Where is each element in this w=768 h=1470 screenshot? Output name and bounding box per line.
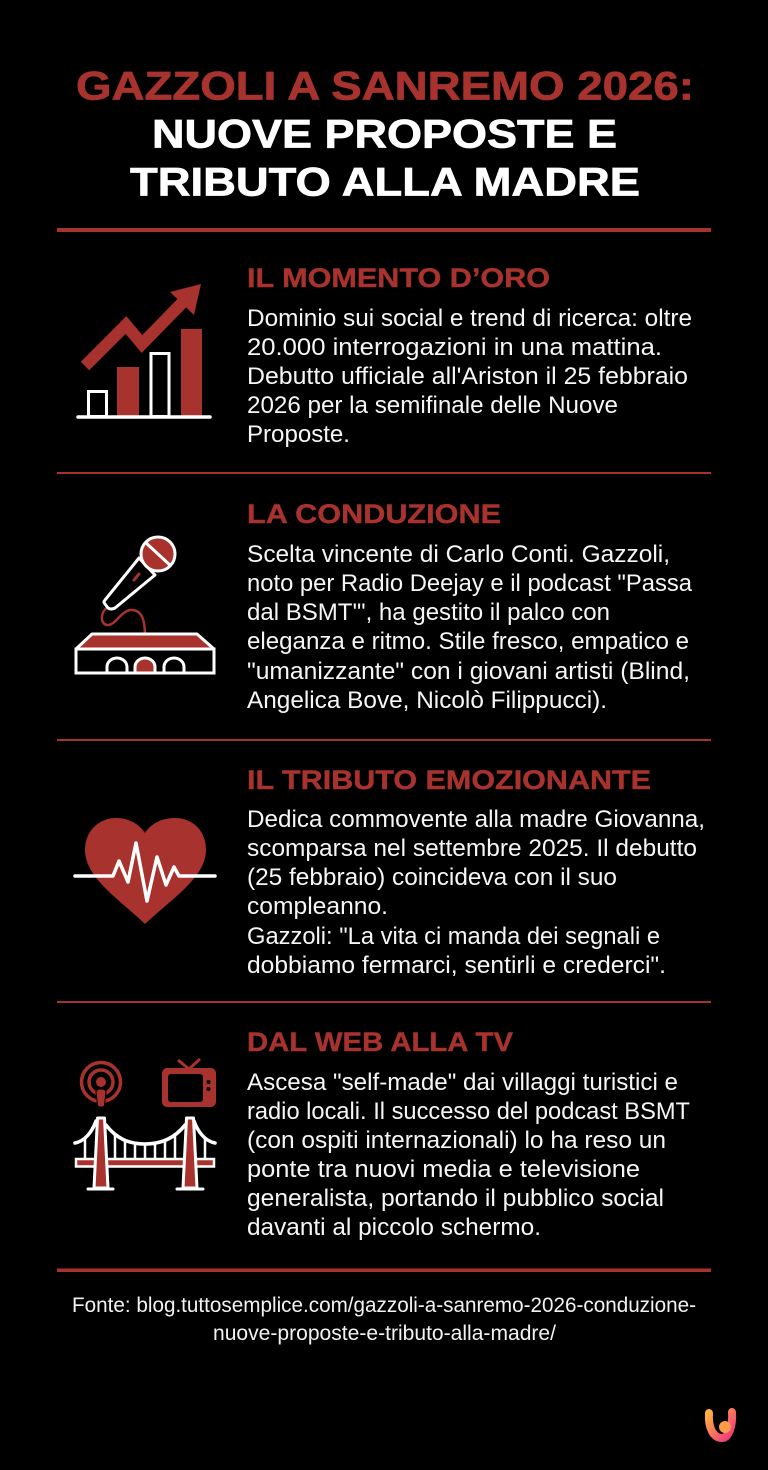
text block: il tributo emozionante: compleanno. (247, 893, 388, 920)
icon: logo (709, 1412, 732, 1438)
title: NUOVE PROPOSTE E (152, 112, 617, 156)
text block: il tributo emozionante: Gazzoli: "La vita ci manda dei segnali e (247, 923, 660, 950)
text block: il momento d'oro: Dominio sui social e trend di ricerca: oltre (247, 305, 692, 332)
text block: la conduzione: Scelta vincente di Carlo Conti. Gazzoli, (247, 541, 670, 568)
heading: il tributo emozionante: IL TRIBUTO EMOZIONANTE (247, 765, 651, 795)
title: TRIBUTO ALLA MADRE (130, 160, 640, 204)
heading: dal web alla tv: DAL WEB ALLA TV (247, 1027, 513, 1057)
text block: dal web alla tv: generalista, portando il pubblico social (247, 1185, 664, 1212)
text block: dal web alla tv: (con ospiti internazionali) lo ha reso un (247, 1127, 666, 1154)
text block: il momento d'oro: Proposte. (247, 421, 350, 448)
text block: dal web alla tv: davanti al piccolo schermo. (247, 1214, 541, 1241)
icon: growth chart (78, 284, 210, 417)
text block: il tributo emozionante: scomparsa nel settembre 2025. Il debutto (247, 835, 697, 862)
text block: il tributo emozionante: Dedica commovente alla madre Giovanna, (247, 806, 705, 833)
text block: il tributo emozionante: dobbiamo fermarci, sentirli e crederci". (247, 952, 666, 979)
title: GAZZOLI A SANREMO 2026: (76, 64, 694, 108)
icon: podcast (82, 1062, 120, 1107)
text block: la conduzione: "umanizzante" con i giovani artisti (Blind, (247, 658, 690, 685)
heading: la conduzione: LA CONDUZIONE (247, 499, 501, 529)
text block: il momento d'oro: 2026 per la semifinale delle Nuove (247, 392, 618, 419)
icon: suspension bridge (75, 1118, 215, 1189)
text block: il tributo emozionante: (25 febbraio) coincideva con il suo (247, 864, 617, 891)
panel: la conduzione (76, 499, 693, 714)
panel: il momento d'oro (78, 263, 692, 448)
text block: dal web alla tv: Ascesa "self-made" dai villaggi turistici e (247, 1069, 678, 1096)
icon: television (162, 1059, 216, 1107)
text block: la conduzione: Angelica Bove, Nicolò Filippucci). (247, 687, 607, 714)
source note (72, 1294, 696, 1345)
source note: Fonte: blog.tuttosemplice.com/gazzoli-a-sanremo-2026-conduzione- (72, 1294, 696, 1317)
source note: nuove-proposte-e-tributo-alla-madre/ (213, 1322, 556, 1345)
title (76, 64, 694, 204)
icon: microphone on stage (76, 537, 214, 673)
panel: il tributo emozionante (75, 765, 705, 979)
panel: dal web alla tv (75, 1027, 690, 1241)
text block: il momento d'oro: Debutto ufficiale all'Ariston il 25 febbraio (247, 363, 688, 390)
heading: il momento d'oro: IL MOMENTO D’ORO (247, 263, 550, 293)
text block: il momento d'oro: 20.000 interrogazioni in una mattina. (247, 334, 662, 361)
text block: la conduzione: noto per Radio Deejay e il podcast "Passa (247, 570, 693, 597)
text block: il tributo emozionante (247, 806, 705, 979)
text block: dal web alla tv: ponte tra nuovi media e televisione (247, 1156, 640, 1183)
text block: la conduzione: eleganza e ritmo. Stile fresco, empatico e (247, 628, 689, 655)
text block: la conduzione: dal BSMT'", ha gestito il palco con (247, 599, 610, 626)
text block: dal web alla tv (247, 1069, 690, 1241)
text block: dal web alla tv: radio locali. Il successo del podcast BSMT (247, 1098, 690, 1125)
text block: il momento d'oro (247, 305, 692, 448)
icon: heart with pulse (75, 818, 215, 924)
text block: la conduzione (247, 541, 693, 714)
